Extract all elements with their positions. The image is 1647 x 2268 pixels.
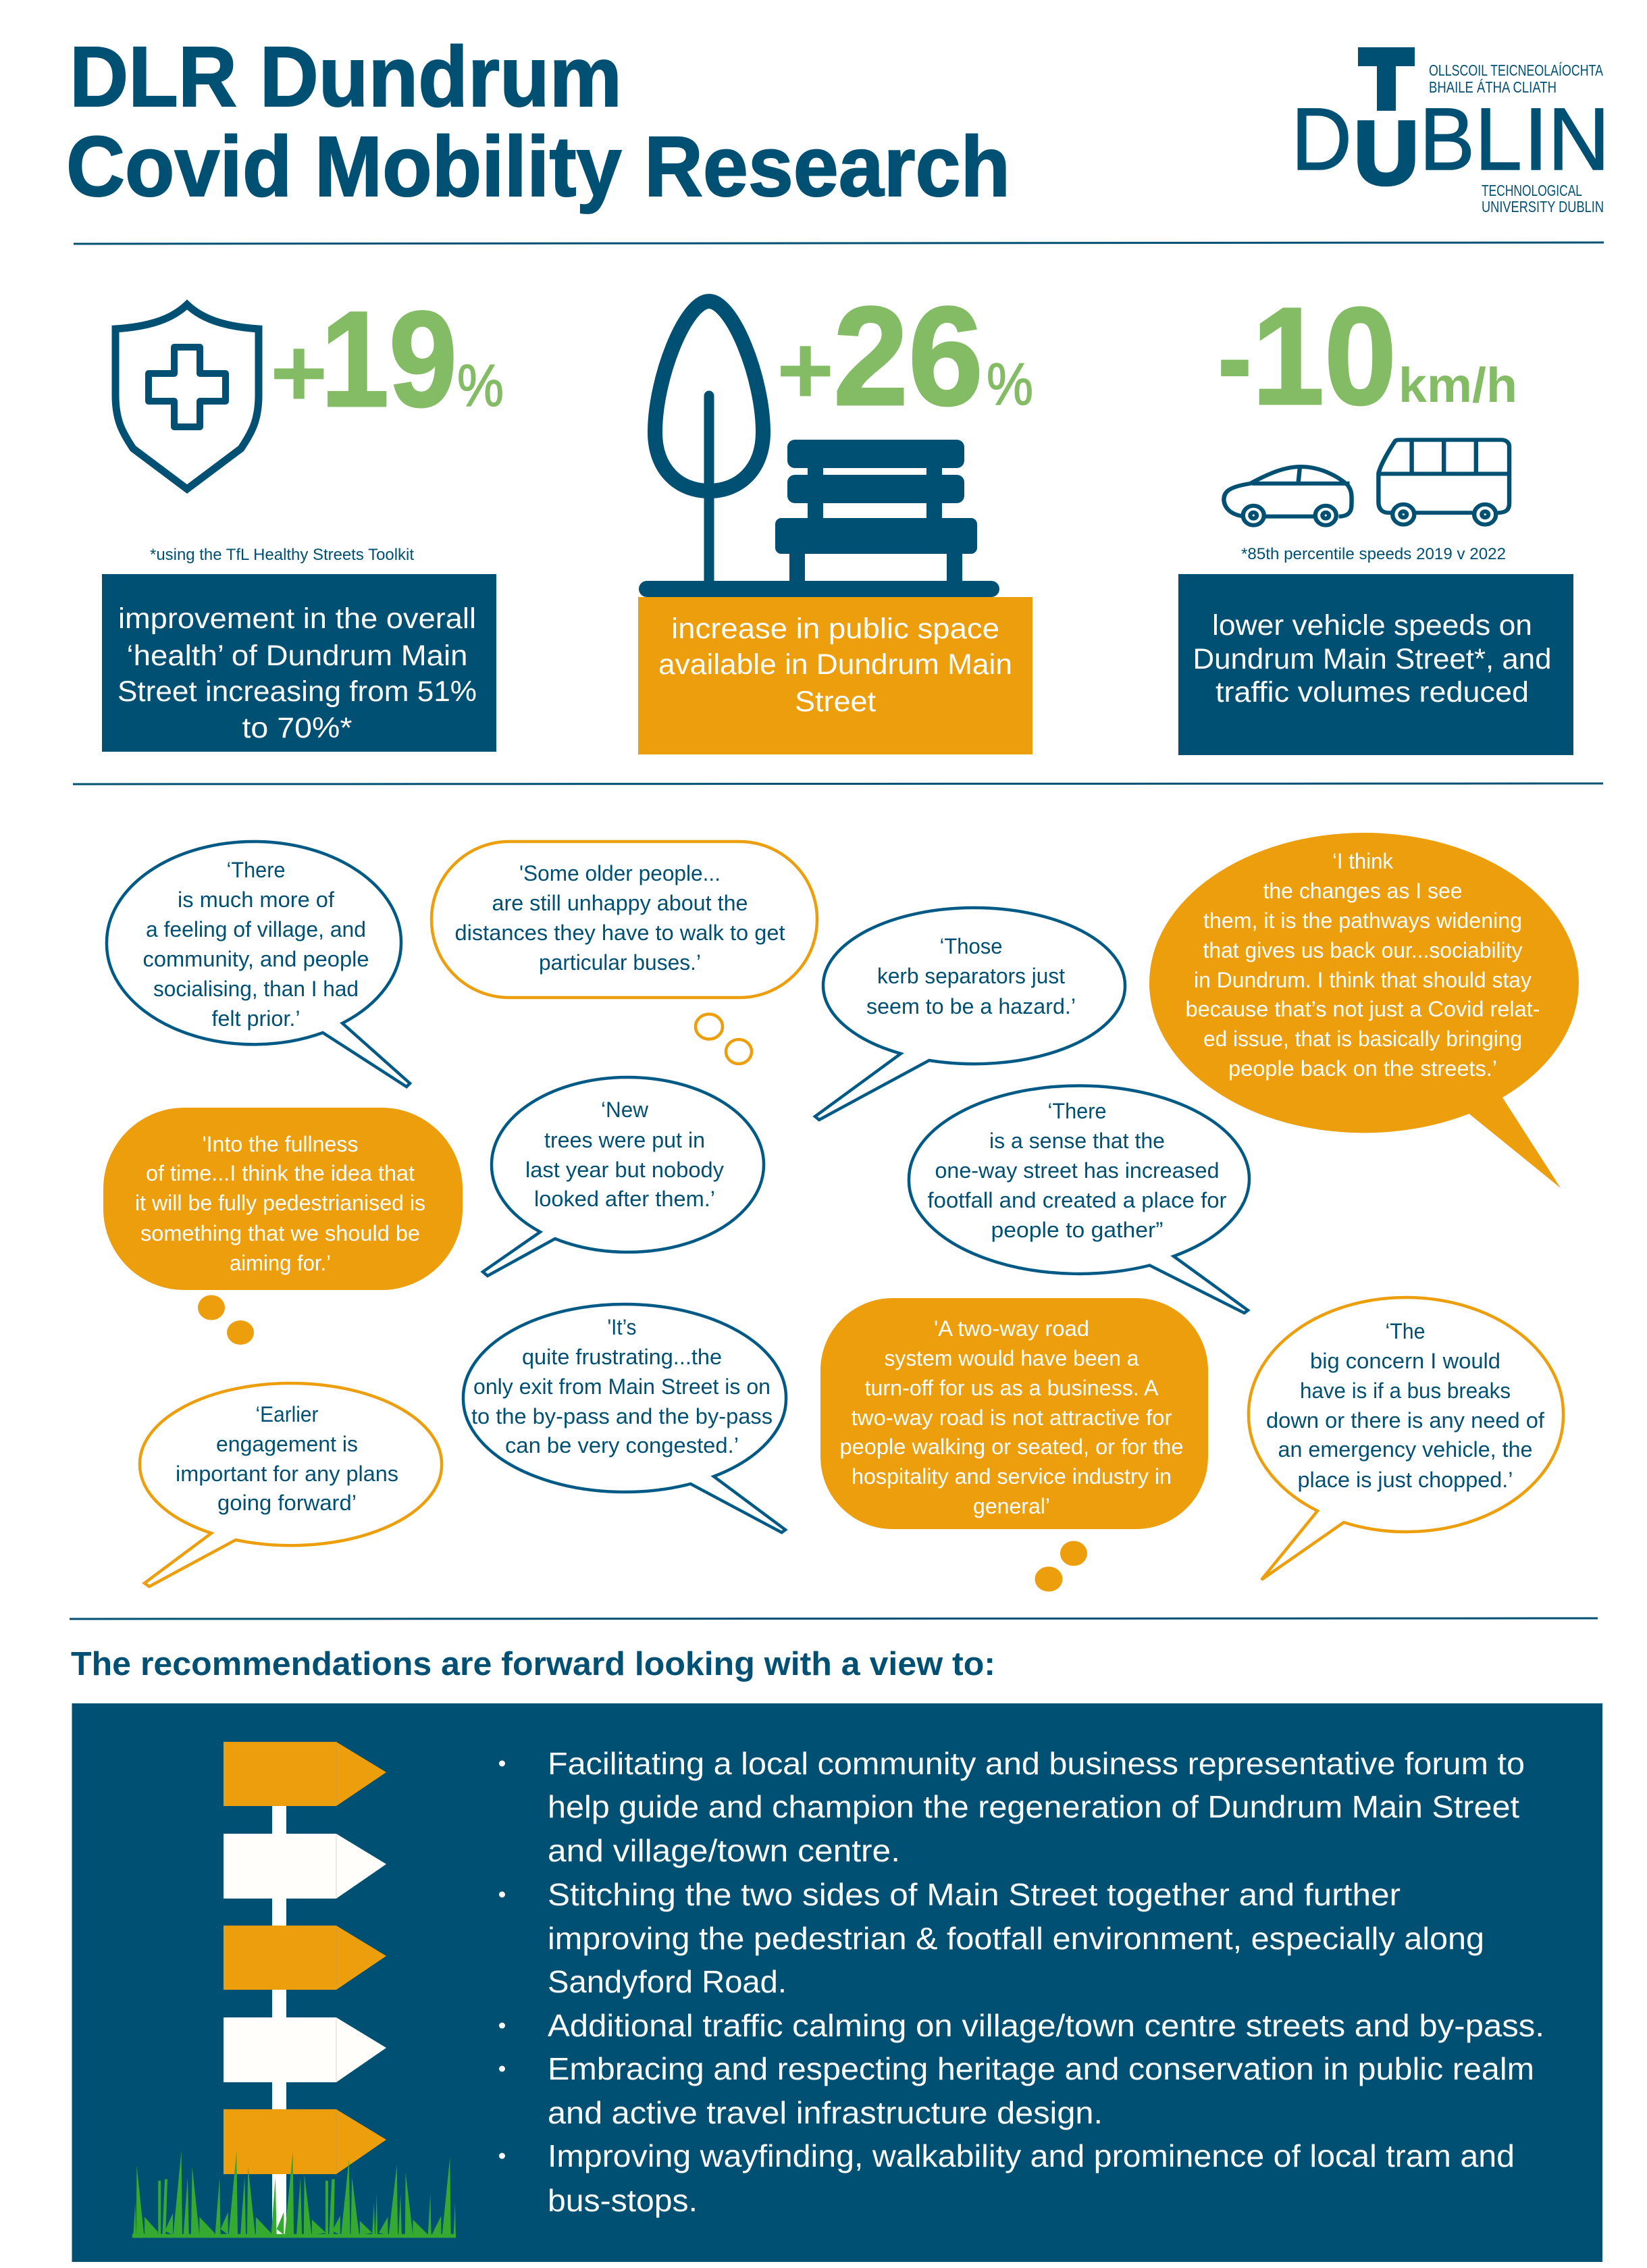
footnote: *using the TfL Healthy Streets Toolkit [150,546,414,564]
logo: TU Dublin: D [1291,89,1352,188]
quote bubble: new trees [483,1077,764,1276]
+26 percent stat: + [777,315,834,425]
bullet list: recommendations: Sandyford Road. [548,1964,787,1999]
logo: TU Dublin: N [1548,89,1610,188]
quote bubble: one-way street: footfall and created a place for [928,1188,1227,1212]
panel: recommendations [72,1703,1602,2262]
bullet list: recommendations: and village/town centre. [548,1833,900,1868]
quote bubble: older people: 'Some older people... [519,861,721,885]
quote bubble: frustrating by-pass: 'It’s [608,1315,636,1339]
quote bubble: village feeling: ‘There [227,858,285,882]
-10 km/h stat: km/h [1398,359,1517,413]
text box: health: improvement in the overall [118,602,476,635]
quote bubble: big concern: an emergency vehicle, the [1278,1437,1533,1462]
quote bubble: pathways widening: in Dundrum. I think that should stay [1194,968,1532,992]
quote bubble: frustrating by-pass: to the by-pass and the by-pass [471,1404,773,1428]
text box: public space: available in Dundrum Main [658,648,1012,681]
quote bubble: two-way road: general’ [973,1494,1050,1518]
quote bubble: two-way road: turn-off for us as a business. A [864,1376,1159,1400]
icon: car [1224,467,1352,525]
quote bubble: two-way road: system would have been a [885,1346,1139,1370]
quote bubble: kerb separators: ‘Those [940,934,1002,958]
text box: public space: increase in public space [671,613,999,645]
quote bubble: new trees: looked after them.’ [534,1187,715,1211]
quote bubble: older people: particular buses.’ [539,950,701,975]
text box: health: ‘health’ of Dundrum Main [127,640,467,672]
quote bubble: big concern: place is just chopped.’ [1298,1468,1513,1492]
quote bubble: kerb separators: kerb separators just [877,964,1065,988]
text box: health [102,574,496,752]
title [66,29,1010,214]
bullet list: recommendations [499,1746,1544,2218]
icon: signpost [224,1742,386,2236]
quote bubble: new trees: trees were put in [544,1128,705,1152]
bullet list: recommendations: Stitching the two sides of Main Street together and further [548,1877,1401,1912]
quote bubble: new trees: ‘New [601,1098,649,1122]
-10 km/h stat: 10 [1252,279,1396,434]
quote bubble: fully pedestrianised: of time...I think the idea that [146,1161,415,1185]
logo: TU Dublin: I [1523,89,1548,188]
quote bubble: fully pedestrianised: aiming for.’ [230,1251,331,1275]
quote bubble: fully pedestrianised: it will be fully pedestrianised is [135,1191,425,1215]
quote bubble: two-way road: people walking or seated, or for the [840,1435,1183,1459]
quote bubble: kerb separators: seem to be a hazard.’ [866,994,1076,1019]
+19 percent stat: 19 [321,283,457,435]
quote bubble: two-way road [820,1298,1208,1591]
quote bubble: big concern: down or there is any need of [1266,1408,1544,1433]
heading: recommendations: The recommendations are forward looking with a view to: [71,1646,995,1682]
quote bubble: big concern: ‘The [1386,1319,1425,1343]
logo: TU Dublin: L [1475,89,1522,188]
quote bubble: early engagement: engagement is [216,1432,358,1456]
icon: shield with cross [115,305,259,489]
quote bubble: village feeling: is much more of [178,887,334,912]
icon: tree [655,301,763,584]
footnote: *85th percentile speeds 2019 v 2022 [1241,545,1506,563]
quote bubble: pathways widening: that gives us back our...sociability [1203,938,1522,962]
text box: public space: Street [795,686,876,718]
+19 percent stat: + [270,317,328,428]
quote bubble: new trees: last year but nobody [525,1158,724,1182]
quote bubble: two-way road: hospitality and service industry in [852,1464,1172,1489]
quote bubble: two-way road: 'A two-way road [934,1316,1089,1341]
quote bubble: pathways widening: them, it is the pathways widening [1203,908,1522,933]
quote bubble: early engagement: ‘Earlier [255,1402,319,1426]
quote bubble: kerb separators [815,908,1125,1120]
title: DLR Dundrum [70,29,622,124]
text box: public space [638,597,1032,754]
quote bubble: one-way street: is a sense that the [989,1129,1165,1153]
bullet list: recommendations: Improving wayfinding, walkability and prominence of local tram and [548,2138,1515,2173]
panel: speed stat [1178,279,1573,755]
bullet list: recommendations: and active travel infrastructure design. [548,2095,1103,2130]
bullet list: recommendations: Embracing and respecting heritage and conservation in public realm [548,2051,1534,2086]
logo: TU Dublin: TECHNOLOGICAL [1482,182,1582,199]
quote bubble: early engagement: important for any plans [176,1462,398,1486]
quote bubble: frustrating by-pass: only exit from Main Street is on [473,1374,770,1399]
logo: TU Dublin: U [1354,103,1419,203]
quote bubble: village feeling: socialising, than I had [153,977,359,1001]
logo: TU Dublin: BHAILE ÁTHA CLIATH [1429,78,1557,96]
quote bubble: pathways widening: people back on the streets.’ [1228,1056,1497,1081]
-10 km/h stat: - [1217,279,1253,434]
text box: health: to 70%* [242,712,352,744]
quote bubble: one-way street [909,1086,1249,1313]
bullet list: recommendations: help guide and champion the regeneration of Dundrum Main Street [548,1789,1519,1824]
panel: health stat [102,283,504,752]
icon: bench [639,440,999,597]
quote bubble: one-way street: one-way street has increased [935,1158,1220,1183]
text box: speeds: Dundrum Main Street*, and [1193,643,1552,675]
quote bubble: early engagement [140,1383,442,1587]
bullet list: recommendations: improving the pedestrian & footfall environment, especially along [548,1921,1484,1956]
bullet list: recommendations: Additional traffic calming on village/town centre streets and by-pass. [548,2008,1544,2043]
icon: bus [1378,440,1509,525]
quote bubble: village feeling: community, and people [143,947,369,971]
quote bubble: frustrating by-pass: can be very congested.’ [505,1433,739,1458]
+19 percent stat: % [457,352,504,419]
quote bubble: village feeling: a feeling of village, and [146,917,366,942]
quote bubble: older people [432,842,817,1064]
logo: TU Dublin: UNIVERSITY DUBLIN [1482,198,1604,215]
quote bubble: frustrating by-pass [463,1304,786,1532]
quote bubble: fully pedestrianised: 'Into the fullness [203,1132,358,1156]
quote bubble: pathways widening: the changes as I see [1263,879,1463,903]
bullet list: recommendations: Facilitating a local community and business representative forum to [548,1746,1525,1781]
quote bubble: pathways widening: ‘I think [1332,849,1394,873]
quote bubble: two-way road: two-way road is not attractive for [851,1406,1172,1430]
text box: speeds: traffic volumes reduced [1215,676,1529,708]
logo: TU Dublin [1291,47,1610,215]
quote bubble: village feeling: felt prior.’ [212,1006,300,1031]
quote bubble: big concern: have is if a bus breaks [1300,1378,1511,1403]
quote bubble: big concern: big concern I would [1310,1349,1500,1373]
quote bubble: one-way street: people to gather” [991,1218,1163,1242]
+26 percent stat: % [987,351,1033,417]
text box: speeds [1178,574,1573,755]
quote bubble: fully pedestrianised [103,1108,463,1345]
quote bubble: one-way street: ‘There [1048,1099,1106,1123]
title: Covid Mobility Research [66,119,1010,214]
-10 km/h stat [1217,279,1517,434]
quote bubble: early engagement: going forward’ [217,1491,357,1515]
text box: health: Street increasing from 51% [117,675,477,708]
panel: public space stat [638,278,1033,754]
logo: TU Dublin: B [1419,89,1475,188]
quote bubble: fully pedestrianised: something that we should be [140,1221,420,1245]
quote bubble: village feeling [107,842,410,1087]
quote bubble: pathways widening [1149,833,1579,1188]
quote bubble: pathways widening: because that’s not just a Covid relat- [1186,997,1540,1021]
+26 percent stat [777,278,1033,435]
quote bubble: older people: are still unhappy about the [492,891,748,915]
+19 percent stat [270,283,504,435]
quote bubble: older people: distances they have to walk to get [455,921,785,945]
text box: speeds: lower vehicle speeds on [1212,609,1532,642]
quote bubble: big concern [1249,1297,1563,1580]
icon: grass [132,2150,456,2238]
quote bubble: frustrating by-pass: quite frustrating...the [522,1345,722,1369]
+26 percent stat: 26 [833,278,983,435]
quote bubble: pathways widening: ed issue, that is basically bringing [1203,1027,1522,1051]
bullet list: recommendations: bus-stops. [548,2183,698,2218]
